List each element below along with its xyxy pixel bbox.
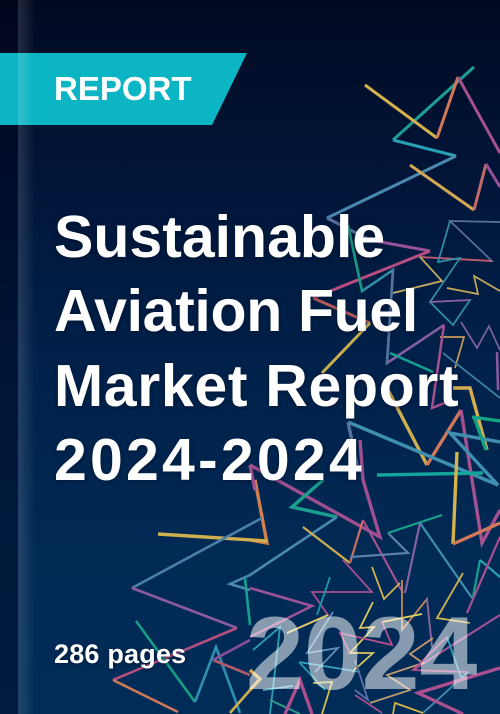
ribbon label: REPORT — [54, 70, 192, 107]
title: Sustainable — [54, 204, 385, 270]
title: 2024-2024 — [54, 427, 365, 493]
report ribbon — [0, 53, 247, 125]
title — [54, 204, 459, 493]
title: Market Report — [54, 353, 459, 419]
book spine band — [18, 0, 35, 714]
ribbon spine highlight — [18, 53, 35, 125]
page count: 286 pages — [54, 639, 186, 669]
year watermark: 2024 — [246, 596, 477, 712]
spine shading — [0, 0, 18, 714]
title: Aviation Fuel — [54, 278, 418, 344]
